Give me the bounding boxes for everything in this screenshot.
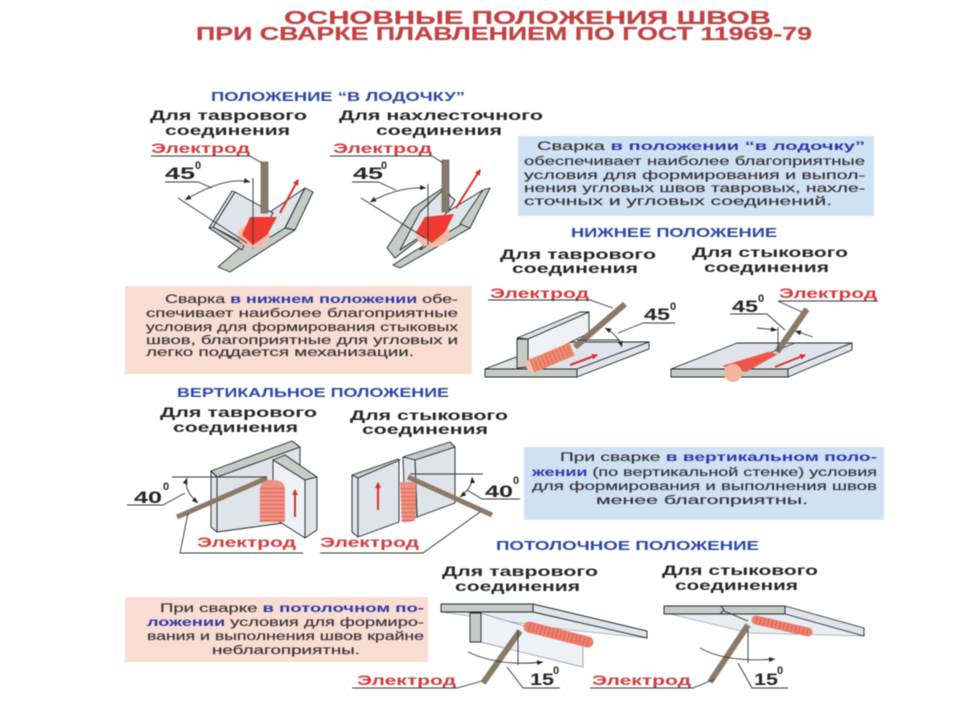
diagram: lap joint in the boat position	[330, 140, 490, 268]
label: lap joint boat: Для нахлесточного	[339, 107, 543, 123]
label: butt joint flat	[692, 244, 848, 275]
diagram: T-joint overhead position	[352, 604, 647, 689]
diagram: butt joint flat position: Электрод	[779, 285, 877, 301]
label: T-joint flat: Для таврового	[500, 246, 656, 262]
diagram: butt joint vertical position: 0	[513, 475, 519, 487]
diagram: lap joint in the boat position: Электрод	[333, 140, 432, 156]
label: T-joint overhead: Для таврового	[442, 563, 598, 579]
panel: boat position note: Сварка в положении “в лодочку”	[537, 141, 865, 153]
label: butt joint overhead: соединения	[675, 577, 798, 593]
label: butt joint flat: Для стыкового	[692, 244, 848, 260]
label: butt joint flat: соединения	[704, 259, 829, 275]
panel: overhead position note: При сварке в потолочном по-	[160, 603, 424, 615]
heading: overhead position: ПОТОЛОЧНОЕ ПОЛОЖЕНИЕ	[496, 538, 759, 553]
label: T-joint flat: соединения	[512, 260, 638, 276]
panel: flat position note: Сварка в нижнем положении обе-	[165, 294, 458, 306]
diagram: T-joint vertical position: 0	[163, 481, 169, 493]
diagram: butt joint overhead position: Электрод	[592, 672, 691, 688]
panel: vertical position note: менее благоприятны.	[596, 495, 808, 507]
diagram: butt joint flat position: 45	[732, 297, 758, 316]
label: T-joint overhead	[442, 563, 598, 594]
panel: flat position note: спечивает наиболее благоприятные	[146, 308, 458, 320]
label: butt joint overhead	[662, 562, 818, 593]
panel: flat position note: условия для формирования стыковых	[146, 322, 458, 334]
diagram: butt joint overhead position: 0	[777, 665, 783, 677]
label: butt joint overhead: Для стыкового	[662, 562, 818, 578]
label: T-joint boat: Для таврового	[150, 107, 307, 123]
label: butt joint vertical	[350, 407, 508, 437]
label: T-joint boat	[150, 107, 307, 138]
diagram: T-joint overhead position: 15	[530, 670, 554, 689]
panel: boat position note: сточных и угловых соединений.	[524, 196, 832, 208]
label: lap joint boat	[339, 107, 543, 138]
panel: overhead position note	[125, 597, 428, 662]
title	[196, 8, 812, 44]
panel: flat position note: легко поддается механизации.	[146, 347, 414, 359]
diagram: butt joint flat position	[671, 285, 878, 382]
diagram: T-joint in the boat position: Электрод	[151, 140, 250, 156]
diagram: T-joint vertical position: Электрод	[197, 534, 296, 550]
title: ОСНОВНЫЕ ПОЛОЖЕНИЯ ШВОВ	[284, 8, 771, 28]
panel: overhead position note: вания и выполнения швов крайне	[147, 631, 424, 643]
diagram: T-joint vertical position: 40	[134, 488, 162, 507]
heading: position in the boat: ПОЛОЖЕНИЕ “В ЛОДОЧКУ”	[211, 89, 465, 104]
label: lap joint boat: соединения	[376, 122, 502, 138]
diagram: T-joint in the boat position: 0	[195, 160, 201, 172]
diagram: T-joint overhead position: 0	[553, 665, 559, 677]
diagram: butt joint vertical position: Электрод	[320, 534, 419, 550]
heading: vertical position: ВЕРТИКАЛЬНОЕ ПОЛОЖЕНИЕ	[177, 385, 449, 400]
diagram: butt joint overhead position	[590, 606, 864, 689]
diagram: butt joint vertical position: 40	[485, 482, 513, 501]
panel: overhead position note: неблагоприятны.	[212, 645, 360, 657]
diagram: T-joint flat position: 45	[644, 305, 670, 324]
label: T-joint flat	[500, 246, 656, 276]
label: T-joint overhead: соединения	[455, 578, 580, 594]
diagram: T-joint overhead position: Электрод	[357, 672, 456, 688]
panel: overhead position note: ложении условия для формиро-	[147, 617, 424, 629]
label: butt joint vertical: Для стыкового	[350, 407, 508, 423]
panel: boat position note: нения угловых швов тавровых, нахле-	[524, 183, 865, 195]
panel: flat position note: швов, благоприятные для угловых и	[146, 335, 458, 347]
label: T-joint vertical: соединения	[173, 419, 298, 435]
panel: flat position note	[125, 286, 472, 374]
diagram: T-joint in the boat position: 45	[165, 164, 195, 183]
title: ПРИ СВАРКЕ ПЛАВЛЕНИЕМ ПО ГОСТ 11969-79	[196, 24, 812, 44]
diagram: T-joint flat position: Электрод	[490, 285, 589, 301]
panel: vertical position note: жении (по вертикальной стенке) условия	[530, 467, 877, 479]
label: butt joint vertical: соединения	[362, 421, 488, 437]
heading: flat position: НИЖНЕЕ ПОЛОЖЕНИЕ	[571, 225, 777, 240]
panel: vertical position note: для формирования и выполнения швов	[532, 481, 877, 493]
diagram: butt joint vertical position	[320, 442, 520, 553]
diagram: butt joint flat position: 0	[758, 293, 764, 305]
panel: vertical position note	[524, 447, 884, 520]
label: T-joint boat: соединения	[165, 122, 290, 138]
diagram: T-joint vertical position	[127, 441, 317, 553]
diagram: T-joint in the boat position	[151, 140, 313, 272]
diagram: lap joint in the boat position: 45	[353, 164, 383, 183]
panel: boat position note: условия для формирования и выпол-	[524, 170, 865, 182]
diagram: butt joint overhead position: 15	[754, 670, 778, 689]
panel: boat position note	[518, 136, 874, 216]
diagram: T-joint flat position	[485, 285, 676, 377]
label: T-joint vertical: Для таврового	[160, 404, 317, 420]
diagram: lap joint in the boat position: 0	[381, 160, 387, 172]
diagram: T-joint flat position: 0	[670, 301, 676, 313]
panel: boat position note: обеспечивает наиболее благоприятные	[524, 156, 865, 168]
label: T-joint vertical	[160, 404, 317, 435]
panel: vertical position note: При сварке в вертикальном поло-	[560, 452, 877, 464]
